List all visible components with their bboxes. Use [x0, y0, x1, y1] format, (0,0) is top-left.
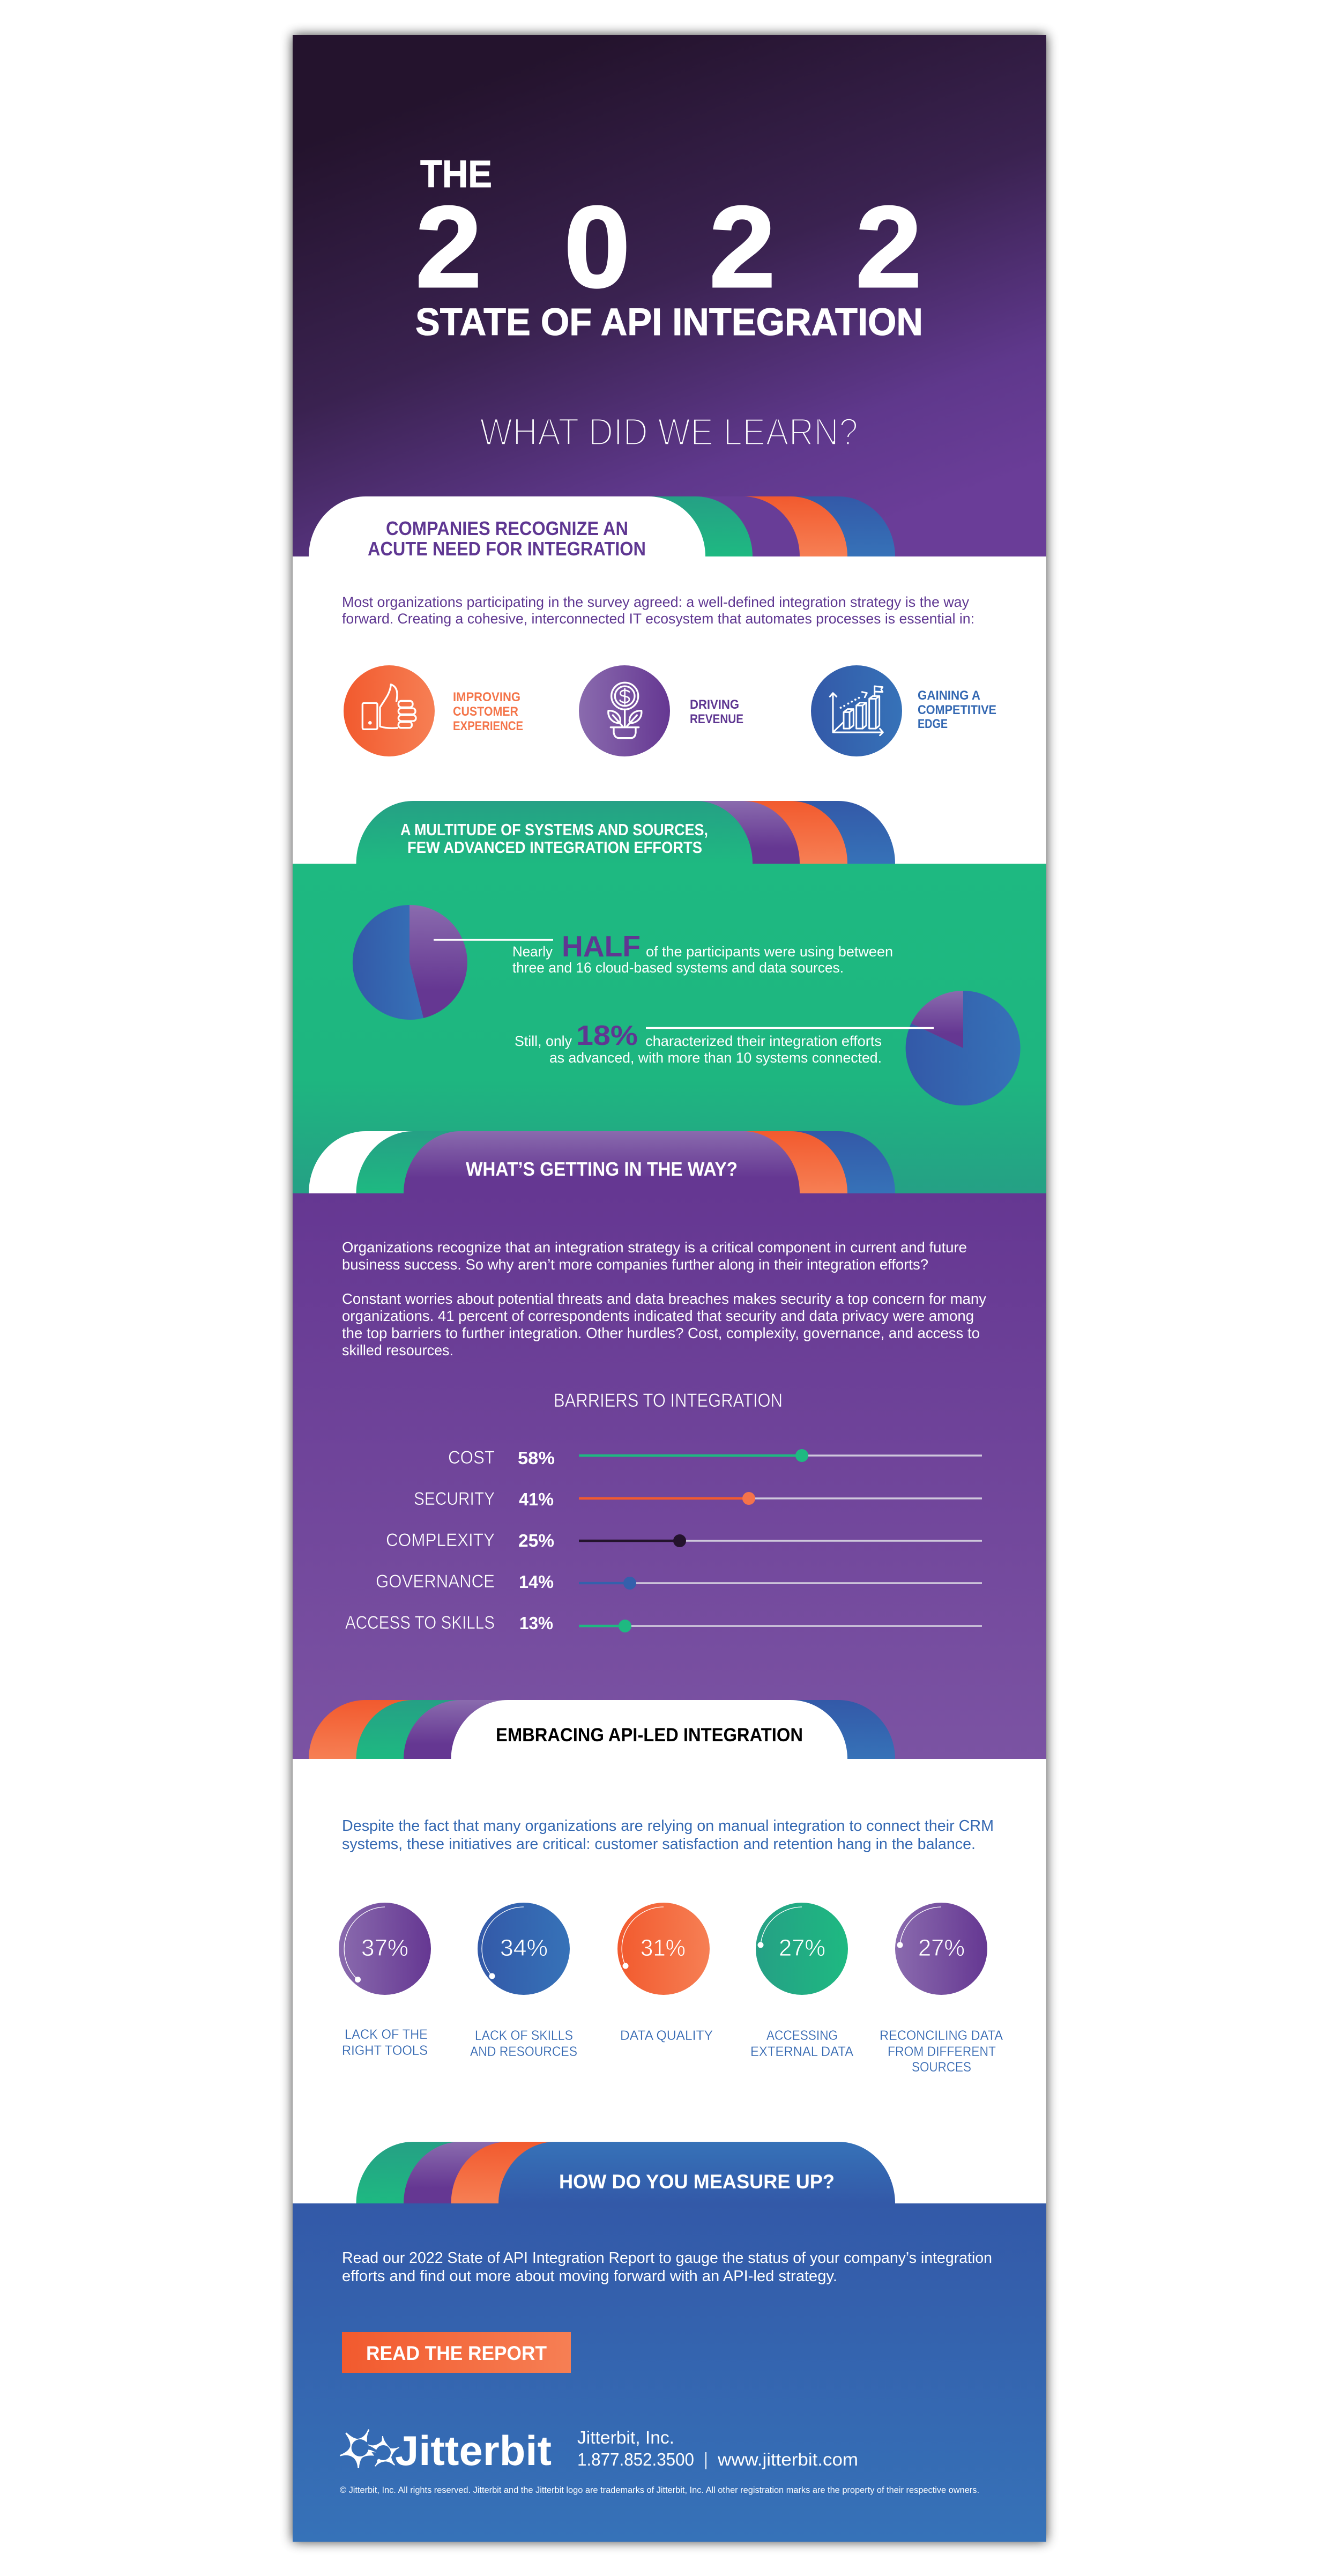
icon: money plant — [579, 665, 670, 756]
gauge: 31% data quality: DATA QUALITY — [620, 2028, 713, 2043]
intro text — [342, 594, 974, 627]
label: driving revenue: DRIVING — [690, 697, 739, 712]
gauge: 31% data quality: 31% — [641, 1935, 686, 1961]
label: improving customer experience: EXPERIENCE — [453, 719, 523, 733]
panel: systems statistics — [293, 864, 1046, 1193]
stat: nearly half: Nearly — [512, 944, 553, 960]
gauge: 34% lack of skills and resources: 34% — [500, 1935, 548, 1961]
body text: business success. So why aren’t more companies further along in their integration efforts? — [342, 1256, 928, 1273]
label: gaining a competitive edge: EDGE — [918, 717, 948, 731]
panel: integration needs — [293, 556, 1046, 864]
section tab: what's getting in the way — [309, 1131, 895, 1193]
label: driving revenue — [690, 697, 743, 726]
row: security 41%: SECURITY — [414, 1489, 495, 1509]
stat: nearly half: of the participants were using between — [646, 944, 893, 960]
label: gaining a competitive edge — [918, 688, 996, 731]
row: governance 14%: GOVERNANCE — [376, 1571, 495, 1592]
section tab: multitude of systems — [356, 801, 895, 864]
stat: only 18 percent: characterized their integration efforts — [645, 1033, 882, 1049]
row: complexity 25%: COMPLEXITY — [386, 1530, 495, 1550]
tab heading — [400, 820, 708, 857]
gauge: 27% reconciling data: RECONCILING DATA — [880, 2028, 1003, 2043]
body text: efforts and find out more about moving forward with an API-led strategy. — [342, 2268, 837, 2285]
body text: Constant worries about potential threats and data breaches makes security a top concern for many — [342, 1290, 986, 1307]
title: year 2022: 2 — [415, 182, 482, 311]
intro text: Despite the fact that many organizations are relying on manual integration to connect their CRM — [342, 1817, 994, 1835]
body text: Organizations recognize that an integration strategy is a critical component in current and future — [342, 1239, 967, 1256]
label: improving customer experience: CUSTOMER — [453, 704, 518, 719]
row: security 41%: 41% — [519, 1489, 554, 1509]
label: improving customer experience — [453, 690, 523, 733]
gauge: 27% accessing external data: EXTERNAL DATA — [750, 2044, 853, 2059]
tab heading: WHAT’S GETTING IN THE WAY? — [466, 1158, 738, 1180]
intro text: systems, these initiatives are critical: customer satisfaction and retention hang in the balance. — [342, 1836, 976, 1853]
gauge: 37% lack of the right tools: LACK OF THE — [345, 2027, 428, 2042]
stat: only 18 percent: as advanced, with more than 10 systems connected. — [549, 1050, 882, 1066]
panel: api-led integration — [293, 1759, 1046, 2203]
panel: call to action footer — [293, 2203, 1046, 2542]
section tab: companies recognize — [309, 496, 895, 560]
row: complexity 25% — [386, 1530, 982, 1550]
panel: title header — [293, 35, 1046, 556]
stat: nearly half — [512, 930, 893, 976]
row: access to skills 13%: ACCESS TO SKILLS — [345, 1613, 495, 1633]
row: access to skills 13%: 13% — [519, 1613, 553, 1633]
body text: skilled resources. — [342, 1342, 453, 1358]
panel: barriers — [293, 1193, 1046, 1759]
tab heading: FEW ADVANCED INTEGRATION EFFORTS — [407, 838, 702, 857]
title: year 2022: 0 — [564, 182, 630, 311]
pie chart: 18 percent — [646, 991, 1021, 1105]
contact details — [577, 2427, 858, 2469]
gauge: 27% reconciling data: 27% — [918, 1935, 965, 1961]
stat: nearly half: HALF — [562, 930, 641, 963]
gauge: 27% reconciling data: SOURCES — [912, 2060, 971, 2075]
row: complexity 25%: 25% — [518, 1531, 554, 1550]
intro text: forward. Creating a cohesive, interconnected IT ecosystem that automates processes is essential in: — [342, 611, 974, 627]
body text: Read our 2022 State of API Integration Report to gauge the status of your company’s integration — [342, 2250, 992, 2267]
section tab: how do you measure up — [356, 2142, 895, 2203]
gauge: 37% lack of the right tools: RIGHT TOOLS — [342, 2043, 428, 2058]
contact details: Jitterbit, Inc. — [577, 2427, 674, 2447]
title: year 2022 — [415, 182, 922, 311]
subtitle: what did we learn: WHAT DID WE LEARN? — [480, 411, 858, 454]
chart title: BARRIERS TO INTEGRATION — [554, 1390, 783, 1411]
label: improving customer experience: IMPROVING — [453, 690, 520, 704]
tab heading: A MULTITUDE OF SYSTEMS AND SOURCES, — [400, 820, 708, 839]
contact details: 1.877.852.3500 — [577, 2449, 694, 2469]
gauge: 34% lack of skills and resources — [470, 1903, 577, 2059]
body text: the top barriers to further integration. Other hurdles? Cost, complexity, governance, and access to — [342, 1325, 980, 1341]
gauge: 27% accessing external data: ACCESSING — [766, 2028, 838, 2043]
label: gaining a competitive edge: COMPETITIVE — [918, 703, 996, 717]
icon: thumbs up — [344, 665, 435, 756]
label: driving revenue: REVENUE — [690, 712, 743, 726]
intro text: Most organizations participating in the survey agreed: a well-defined integration strategy is the way — [342, 594, 969, 610]
title: year 2022: 2 — [709, 182, 776, 311]
title: the: THE — [420, 153, 492, 196]
gauge: 27% accessing external data — [750, 1903, 853, 2059]
intro text — [342, 1817, 994, 1853]
copyright: © Jitterbit, Inc. All rights reserved. Jitterbit and the Jitterbit logo are trademarks of Jitterbit, Inc. All other registration marks are the property of their respective owners. — [340, 2485, 979, 2495]
row: cost 58%: 58% — [518, 1448, 555, 1468]
row: governance 14% — [376, 1571, 982, 1592]
pie chart: half — [353, 905, 553, 1020]
row: access to skills 13% — [345, 1613, 982, 1633]
slider chart: barriers — [345, 1447, 982, 1633]
row: cost 58% — [448, 1447, 982, 1468]
body text — [342, 1239, 986, 1358]
tab heading: COMPANIES RECOGNIZE AN — [386, 517, 628, 539]
gauge: 27% reconciling data — [880, 1903, 1003, 2075]
button: read the report: READ THE REPORT — [366, 2342, 547, 2364]
icon: growth chart — [811, 665, 902, 756]
logo: jitterbit: Jitterbit — [395, 2427, 552, 2474]
stat: only 18 percent: Still, only — [515, 1033, 572, 1049]
stat: nearly half: three and 16 cloud-based systems and data sources. — [512, 960, 844, 976]
label: gaining a competitive edge: GAINING A — [918, 688, 980, 703]
contact details: www.jitterbit.com — [717, 2449, 858, 2469]
title: state of api integration: STATE OF API INTEGRATION — [415, 301, 923, 344]
card drop shadow — [293, 35, 1046, 2542]
gauge: 37% lack of the right tools — [339, 1903, 431, 2058]
gauge: 27% accessing external data: 27% — [779, 1935, 825, 1961]
row: cost 58%: COST — [448, 1447, 495, 1468]
body text — [342, 2250, 992, 2285]
tab heading: ACUTE NEED FOR INTEGRATION — [368, 538, 646, 560]
tab heading: EMBRACING API-LED INTEGRATION — [496, 1725, 803, 1746]
gauge: 27% reconciling data: FROM DIFFERENT — [888, 2044, 996, 2059]
button: read the report — [342, 2332, 571, 2373]
title: year 2022: 2 — [855, 182, 922, 311]
stat: only 18 percent — [515, 1020, 882, 1066]
gauge: 37% lack of the right tools: 37% — [361, 1935, 408, 1961]
row: governance 14%: 14% — [519, 1572, 554, 1592]
section tab: embracing api-led integration — [309, 1700, 895, 1759]
body text: organizations. 41 percent of correspondents indicated that security and data privacy were among — [342, 1308, 974, 1324]
gauge: 31% data quality — [617, 1903, 713, 2043]
gauge: 34% lack of skills and resources: AND RESOURCES — [470, 2044, 577, 2059]
tab heading — [368, 517, 646, 560]
stat: only 18 percent: 18% — [576, 1020, 638, 1051]
row: security 41% — [414, 1489, 982, 1509]
gauge: 34% lack of skills and resources: LACK OF SKILLS — [475, 2028, 573, 2043]
tab heading: HOW DO YOU MEASURE UP? — [559, 2171, 835, 2193]
